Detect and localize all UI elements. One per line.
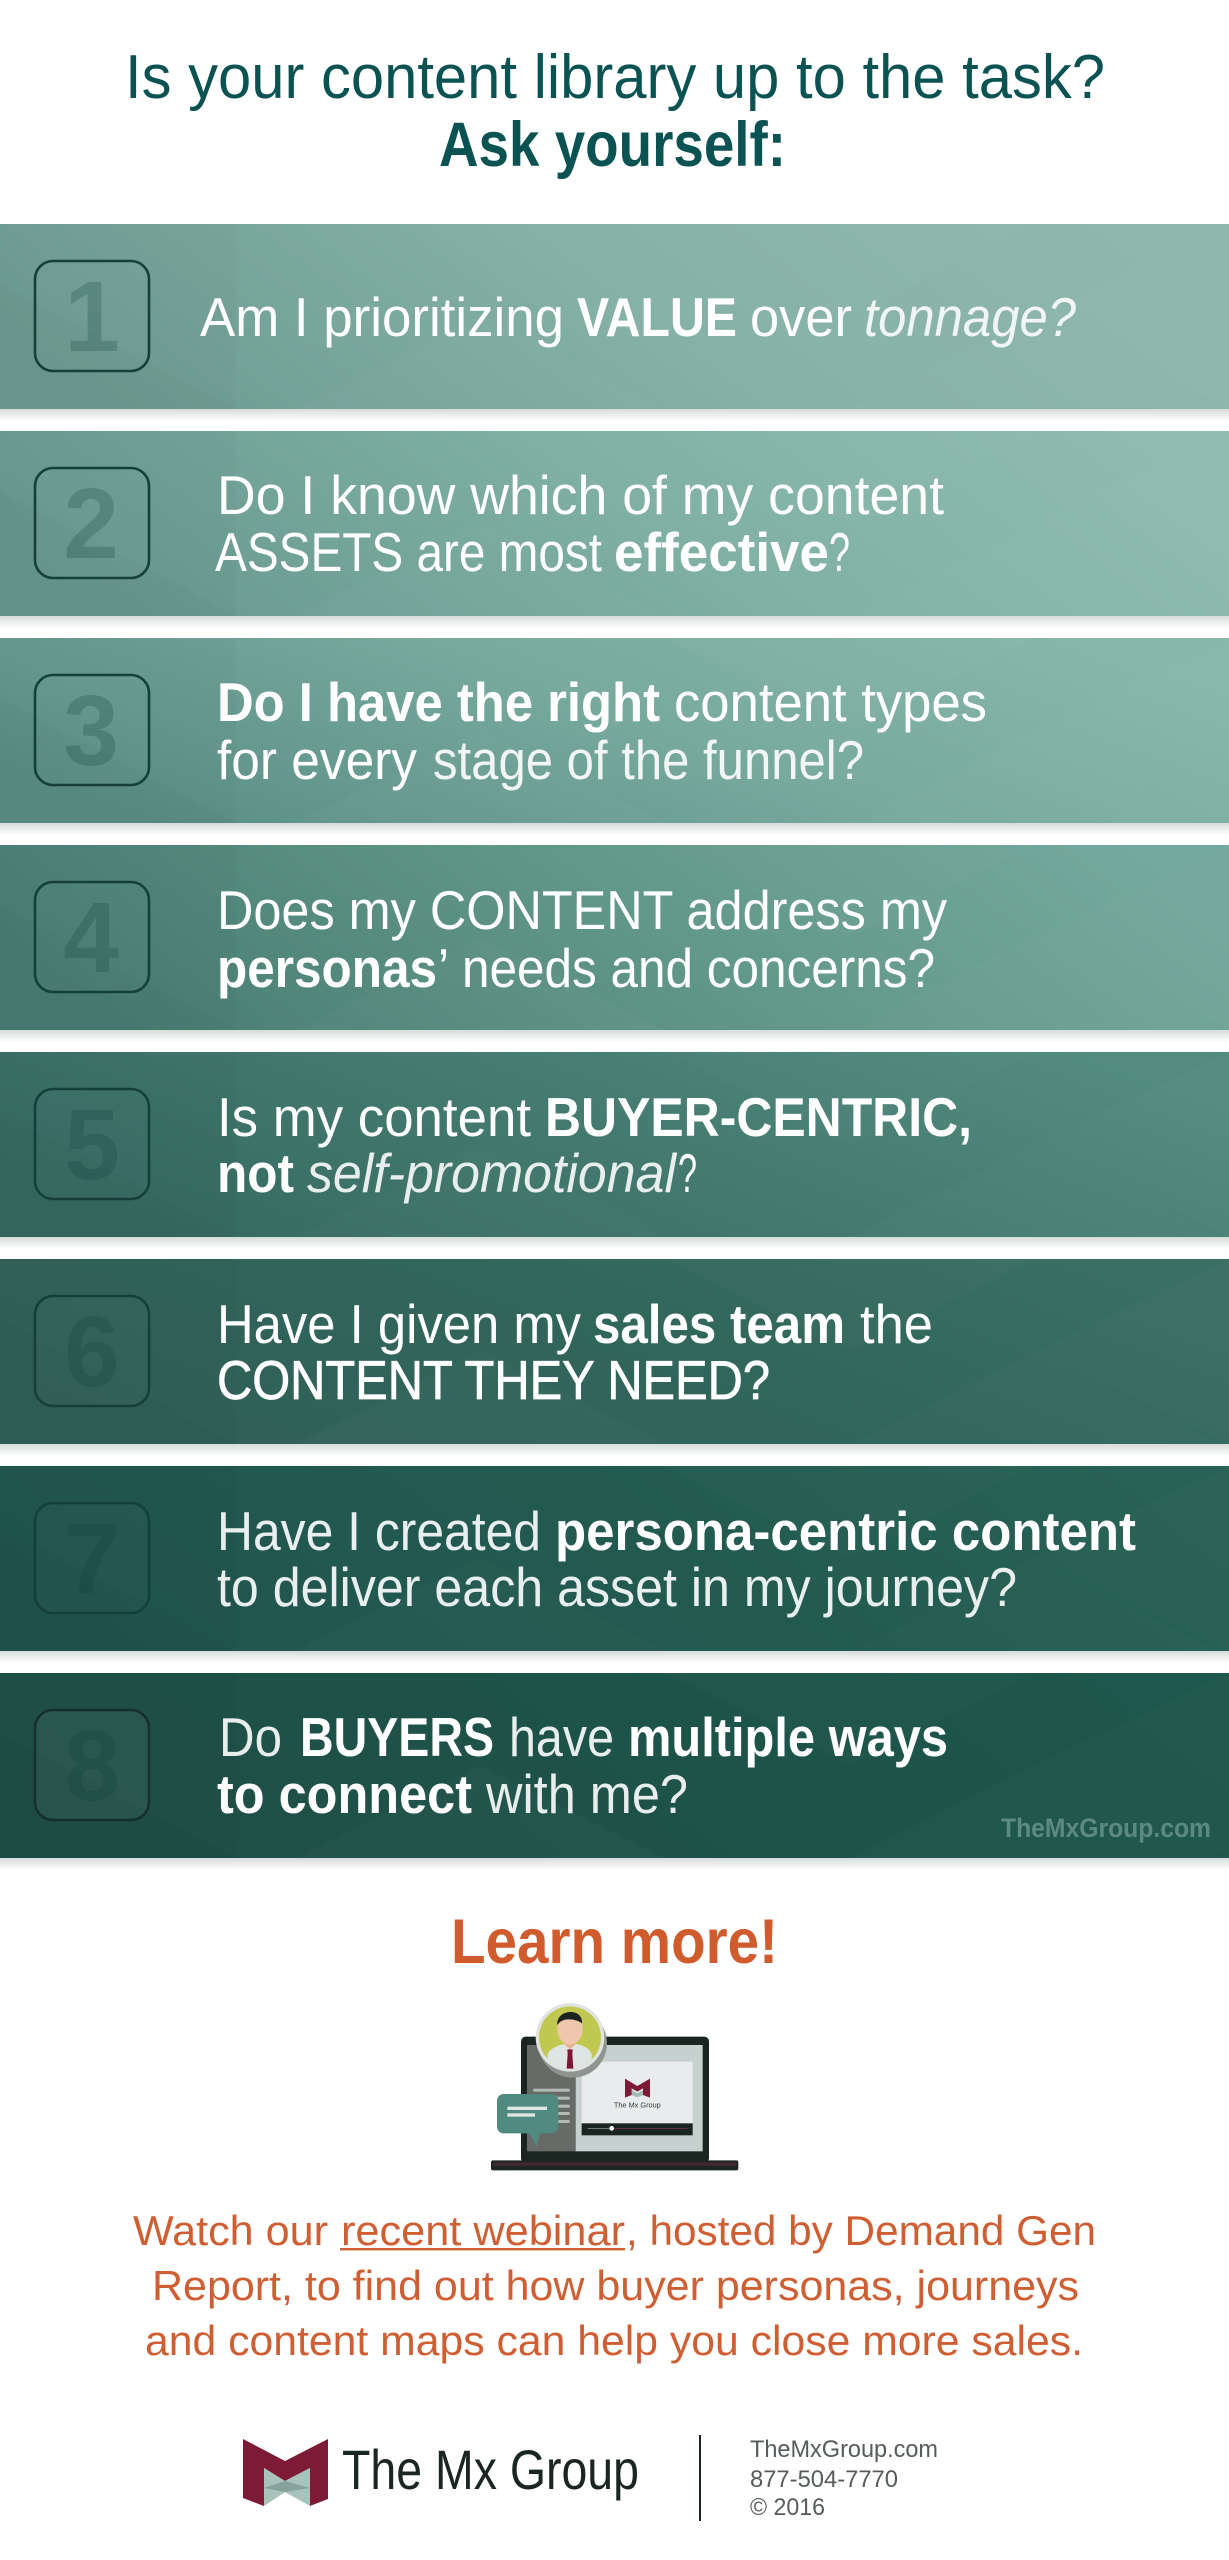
question text 5: BUYER-CENTRIC, — [545, 1086, 972, 1148]
number badge 7: 7 — [64, 1503, 120, 1615]
number badge 5: 5 — [64, 1089, 120, 1201]
number badge 7 — [35, 1503, 149, 1615]
question text 6: CONTENT THEY NEED? — [217, 1349, 770, 1411]
question text 4: Does my CONTENT address my — [217, 879, 947, 941]
question text 7 — [217, 1500, 1136, 1618]
question text 5 — [217, 1086, 972, 1204]
question text 8: have — [509, 1706, 614, 1768]
question text 3: content types — [674, 671, 987, 733]
question text 5: Is my content — [217, 1086, 531, 1148]
logo: The Mx Group: The Mx Group — [342, 2438, 639, 2501]
panel: question 8 — [0, 1673, 1229, 1870]
question text 5: self-promotional — [307, 1142, 678, 1204]
question text 1: Am I prioritizing — [200, 286, 564, 348]
question text 8: with me? — [485, 1763, 688, 1825]
number badge 8 — [35, 1710, 149, 1822]
question text 5: not — [217, 1142, 294, 1204]
panel: question 3 — [0, 638, 1229, 835]
body text: webinar call to action: recent webinar — [341, 2207, 625, 2254]
number badge 4 — [35, 882, 149, 994]
divider — [699, 2435, 701, 2521]
question text 5: ? — [678, 1142, 697, 1204]
question text 8: Do — [219, 1706, 282, 1768]
question text 4: ’ — [438, 937, 449, 999]
question text 2 — [215, 464, 944, 583]
question text 1: over — [750, 286, 852, 348]
question text 6: sales team — [593, 1293, 845, 1355]
illustration: laptop with presenter — [491, 2003, 738, 2170]
question text 7: to deliver each asset in my journey? — [217, 1556, 1017, 1618]
question text 3: Do I have the right — [217, 671, 660, 733]
watermark: TheMxGroup.com — [1001, 1813, 1211, 1843]
contact details: TheMxGroup.com — [750, 2436, 938, 2463]
question text 1: tonnage? — [864, 286, 1076, 348]
title: Is your content library up to the task? — [125, 43, 1105, 112]
number badge 3 — [35, 675, 149, 787]
question text 8: BUYERS — [300, 1706, 494, 1768]
number badge 1: 1 — [64, 261, 120, 373]
number badge 5 — [35, 1089, 149, 1201]
body text: webinar call to action: Watch our — [133, 2207, 328, 2254]
body text: webinar call to action: and content maps can help you close more sales. — [145, 2317, 1083, 2364]
question text 2: ASSETS are most — [215, 521, 602, 583]
body text: webinar call to action: , hosted by Demand Gen — [626, 2207, 1096, 2254]
number badge 8: 8 — [64, 1710, 120, 1822]
number badge 6: 6 — [64, 1296, 120, 1408]
panel: question 4 — [0, 845, 1229, 1042]
contact details — [750, 2436, 938, 2521]
illustration: laptop with presenter: The Mx Group — [614, 2100, 661, 2109]
question text 8: multiple ways — [628, 1706, 948, 1768]
question text 6 — [217, 1293, 933, 1411]
panel: question 6 — [0, 1259, 1229, 1456]
contact details: © 2016 — [750, 2494, 825, 2521]
question text 1: VALUE — [577, 286, 737, 348]
contact details: 877-504-7770 — [750, 2466, 898, 2493]
heading: learn more: Learn more! — [451, 1907, 778, 1977]
panel: question 1 — [0, 224, 1229, 421]
question text 4 — [217, 879, 947, 999]
question text 2: Do I know which of my content — [217, 464, 944, 526]
title: Ask yourself: — [439, 110, 786, 180]
question text 1 — [200, 286, 1076, 348]
question text 3: for every — [217, 729, 417, 791]
number badge 2: 2 — [63, 468, 119, 580]
number badge 4: 4 — [63, 882, 119, 994]
number badge 1 — [35, 261, 149, 373]
question text 6: Have I given my — [217, 1293, 581, 1355]
question text 7: Have I created — [217, 1500, 541, 1562]
question text 2: effective — [614, 521, 829, 583]
question text 4: needs and concerns? — [462, 937, 935, 999]
number badge 6 — [35, 1296, 149, 1408]
question text 7: persona-centric content — [555, 1500, 1136, 1562]
body text: webinar call to action: Report, to find out how buyer personas, journeys — [152, 2262, 1079, 2309]
question text 8: to connect — [217, 1763, 472, 1825]
logo: The Mx Group — [243, 2438, 639, 2506]
panel: question 2 — [0, 431, 1229, 628]
panel: question 7 — [0, 1466, 1229, 1663]
number badge 3: 3 — [63, 675, 119, 787]
panel: question 5 — [0, 1052, 1229, 1249]
question text 4: personas — [217, 937, 437, 999]
question text 2: ? — [829, 521, 850, 583]
question text 6: the — [860, 1293, 933, 1355]
question text 8 — [217, 1706, 948, 1825]
title — [125, 43, 1105, 180]
question text 3: stage of the funnel? — [433, 729, 864, 791]
body text: webinar call to action — [133, 2207, 1096, 2364]
question text 3 — [217, 671, 987, 791]
number badge 2 — [35, 468, 149, 580]
